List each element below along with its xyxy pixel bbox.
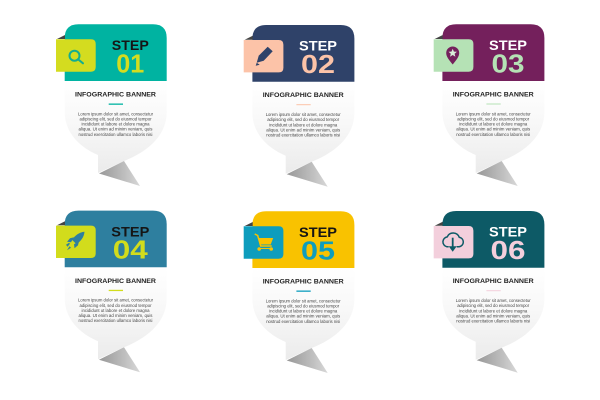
- icon: cloud download: [443, 233, 463, 252]
- body text: aliqua. Ut enim ad minim veniam, quis: [78, 127, 153, 132]
- body text: incididunt ut labore et dolore magna: [459, 308, 528, 313]
- accent line: [486, 104, 501, 105]
- body text: nostrud exercitation ullamco laboris nisi: [78, 132, 153, 137]
- icon tab: [434, 39, 473, 72]
- step label: STEP: [112, 37, 149, 53]
- tail fold: [99, 161, 140, 186]
- icon tab: [56, 39, 96, 72]
- body text: incididunt ut labore et dolore magna: [269, 309, 338, 314]
- icon tab: [56, 226, 96, 258]
- accent line: [109, 290, 123, 291]
- body text: nostrud exercitation ullamco laboris nisi: [78, 318, 153, 323]
- step label: STEP: [299, 224, 337, 240]
- tail fold: [287, 162, 328, 187]
- icon: pencil: [256, 47, 273, 66]
- body text: aliqua. Ut enim ad minim veniam, quis: [456, 313, 531, 318]
- body text: adipiscing elit, sed do eiusmod tempor: [267, 117, 340, 122]
- corner fold: [245, 222, 253, 226]
- body text: nostrud exercitation ullamco laboris nisi: [266, 133, 340, 138]
- speech body: [65, 267, 167, 359]
- body text: [266, 112, 341, 138]
- accent line: [486, 290, 501, 291]
- speech body: [252, 82, 354, 174]
- body text: aliqua. Ut enim ad minim veniam, quis: [266, 314, 341, 319]
- card: step 04: [56, 211, 167, 372]
- body text: incididunt ut labore et dolore magna: [82, 122, 150, 127]
- step number: 01: [116, 50, 144, 78]
- banner title: INFOGRAPHIC BANNER: [75, 92, 156, 98]
- body text: [78, 111, 154, 137]
- body text: [78, 298, 154, 323]
- icon: magnifier: [70, 51, 83, 63]
- speech body: [442, 268, 544, 360]
- accent line: [109, 104, 123, 105]
- header: [442, 211, 544, 268]
- step number: 03: [492, 50, 525, 78]
- tail fold: [477, 348, 518, 373]
- body text: incididunt ut labore et dolore magna: [459, 122, 528, 127]
- accent line: [296, 290, 311, 292]
- body text: Lorem ipsum dolor sit amet, consectetur: [266, 298, 341, 303]
- body text: [266, 298, 341, 324]
- speech body: [442, 81, 544, 173]
- body text: [456, 298, 531, 324]
- body text: adipiscing elit, sed do eiusmod tempor: [80, 303, 152, 308]
- icon tab: [434, 226, 473, 258]
- banner title: INFOGRAPHIC BANNER: [75, 278, 156, 285]
- body text: incididunt ut labore et dolore magna: [82, 308, 150, 313]
- body text: Lorem ipsum dolor sit amet, consectetur: [456, 111, 531, 116]
- header: [65, 211, 167, 267]
- corner fold: [57, 35, 65, 39]
- step label: STEP: [489, 224, 527, 240]
- body text: Lorem ipsum dolor sit amet, consectetur: [78, 111, 154, 116]
- body text: [456, 111, 531, 137]
- step label: STEP: [111, 223, 149, 239]
- body text: Lorem ipsum dolor sit amet, consectetur: [266, 112, 341, 117]
- speech body: [252, 268, 354, 360]
- header: [65, 24, 167, 81]
- card: step 06: [434, 211, 544, 373]
- banner title: INFOGRAPHIC BANNER: [263, 278, 344, 286]
- icon tab: [244, 226, 283, 259]
- body text: aliqua. Ut enim ad minim veniam, quis: [266, 127, 341, 132]
- corner fold: [435, 35, 443, 39]
- card: step 05: [244, 211, 354, 373]
- icon: shopping cart: [255, 234, 273, 251]
- corner fold: [435, 222, 443, 226]
- icon tab: [244, 40, 283, 72]
- step number: 06: [491, 237, 526, 265]
- card: step 03: [434, 24, 544, 186]
- speech body: [65, 81, 167, 173]
- step number: 02: [301, 51, 335, 79]
- header: [252, 211, 354, 268]
- body text: incididunt ut labore et dolore magna: [269, 122, 338, 127]
- accent line: [296, 104, 311, 105]
- step number: 05: [301, 237, 335, 265]
- body text: adipiscing elit, sed do eiusmod tempor: [80, 116, 152, 122]
- tail fold: [99, 347, 140, 372]
- body text: nostrud exercitation ullamco laboris nisi: [266, 319, 340, 324]
- banner title: INFOGRAPHIC BANNER: [263, 92, 344, 99]
- header: [442, 24, 544, 81]
- body text: nostrud exercitation ullamco laboris nisi: [456, 318, 530, 324]
- body text: aliqua. Ut enim ad minim veniam, quis: [456, 127, 531, 132]
- header: [252, 25, 354, 82]
- tail fold: [287, 348, 328, 373]
- corner fold: [245, 36, 253, 40]
- step label: STEP: [299, 38, 337, 54]
- body text: adipiscing elit, sed do eiusmod tempor: [457, 116, 530, 122]
- card: step 01: [56, 24, 167, 186]
- step label: STEP: [489, 37, 527, 53]
- body text: adipiscing elit, sed do eiusmod tempor: [457, 303, 530, 308]
- body text: aliqua. Ut enim ad minim veniam, quis: [78, 313, 153, 318]
- tail fold: [477, 161, 518, 186]
- body text: adipiscing elit, sed do eiusmod tempor: [267, 304, 340, 308]
- body text: Lorem ipsum dolor sit amet, consectetur: [78, 298, 154, 303]
- icon: map pin with star: [446, 47, 459, 64]
- icon: rocket: [66, 232, 84, 250]
- body text: nostrud exercitation ullamco laboris nisi: [456, 132, 530, 137]
- corner fold: [57, 221, 65, 225]
- banner title: INFOGRAPHIC BANNER: [453, 92, 534, 98]
- banner title: INFOGRAPHIC BANNER: [453, 278, 534, 285]
- body text: Lorem ipsum dolor sit amet, consectetur: [456, 298, 531, 303]
- card: step 02: [244, 25, 354, 187]
- step number: 04: [113, 237, 149, 265]
